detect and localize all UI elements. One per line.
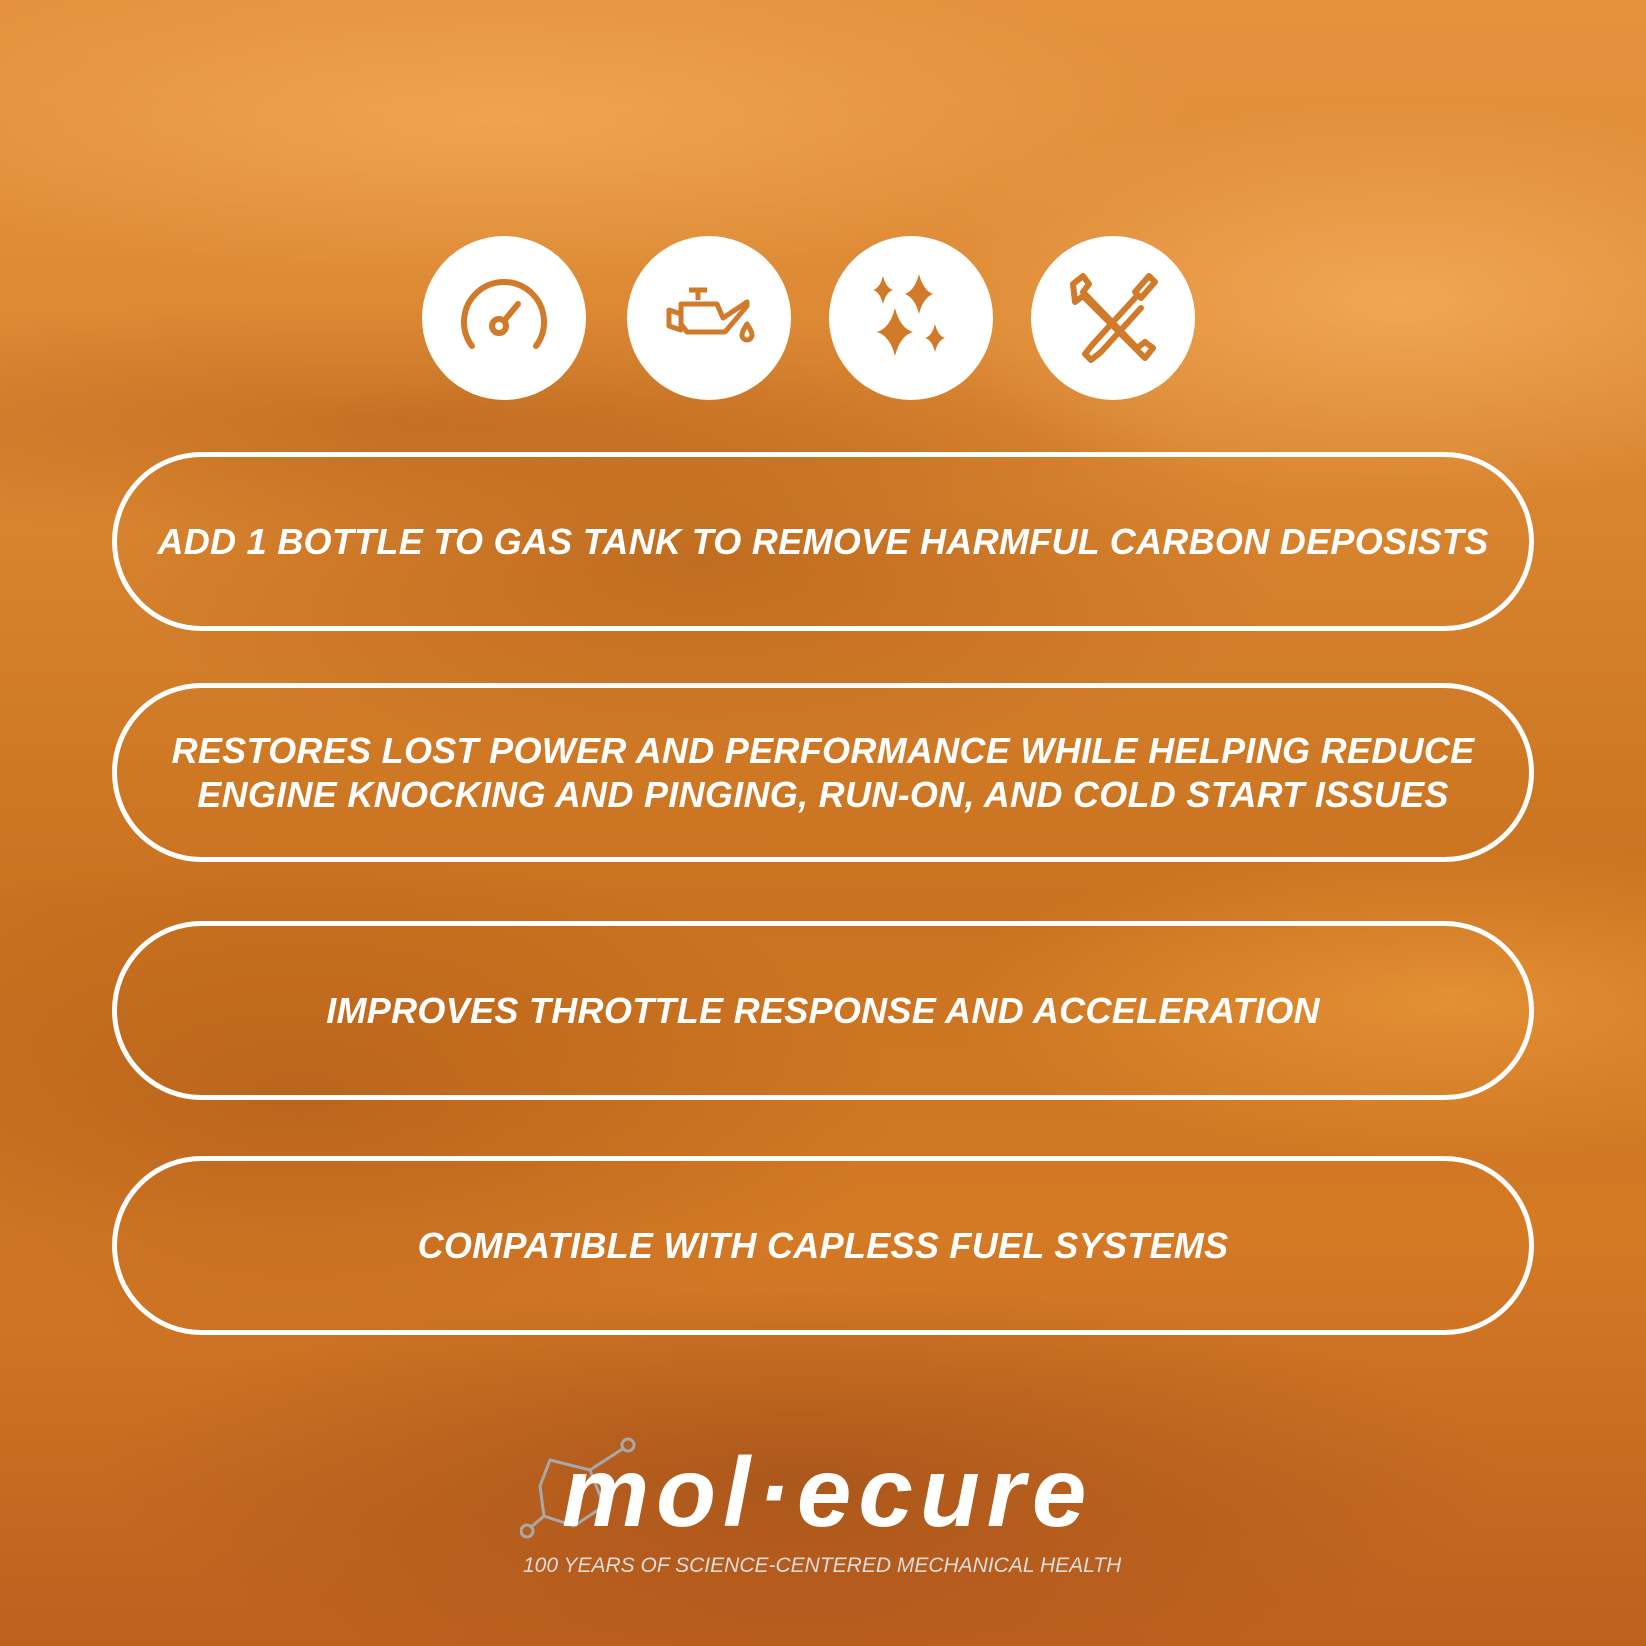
pill 2: ENGINE KNOCKING AND PINGING, RUN-ON, AND COLD START ISSUES: [197, 774, 1449, 814]
icon: oil can: [627, 236, 791, 400]
pill 4: COMPATIBLE WITH CAPLESS FUEL SYSTEMS: [418, 1224, 1228, 1266]
logo molecule: [520, 1438, 636, 1538]
icon: tools: [1031, 236, 1195, 400]
logo wordmark: mol·ecure: [562, 1437, 1093, 1547]
pill 4: [112, 1156, 1534, 1335]
pill 1: [112, 452, 1534, 631]
icon: speedometer: [422, 236, 586, 400]
pill 3: [112, 921, 1534, 1100]
icon: sparkles: [829, 236, 993, 400]
logo: [520, 1437, 1122, 1577]
pill 3: IMPROVES THROTTLE RESPONSE AND ACCELERATION: [326, 990, 1320, 1030]
pill 2: RESTORES LOST POWER AND PERFORMANCE WHILE HELPING REDUCE: [172, 730, 1474, 770]
tagline: 100 YEARS OF SCIENCE-CENTERED MECHANICAL HEALTH: [523, 1554, 1121, 1577]
pill 2: [112, 683, 1534, 862]
pill 1: ADD 1 BOTTLE TO GAS TANK TO REMOVE HARMFUL CARBON DEPOSISTS: [157, 520, 1489, 562]
